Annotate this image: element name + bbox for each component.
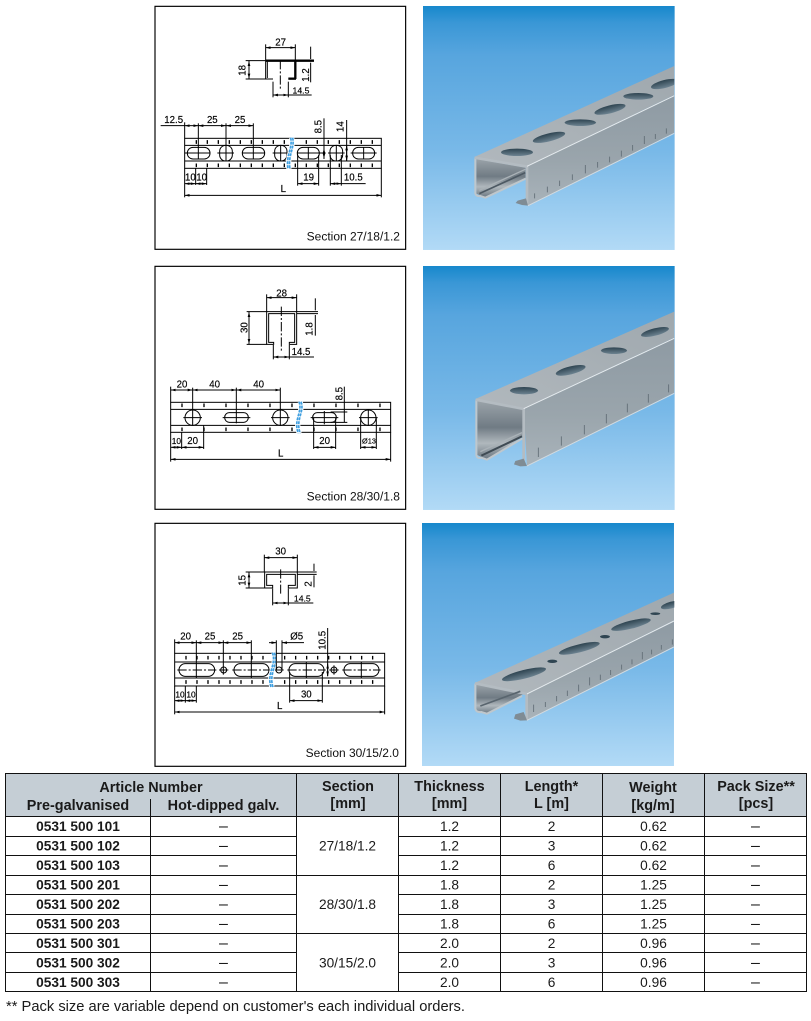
table grid (5, 773, 806, 992)
column: thickness: 2.0 (440, 975, 459, 990)
column: length: 3 (548, 838, 556, 854)
column: length: 6 (548, 916, 556, 932)
column: length: 3 (548, 897, 556, 912)
panel: section 28/30/1.8 photo (423, 266, 675, 510)
column: hot-dipped: – (219, 857, 228, 874)
column: article numbers: 0531 500 303 (36, 975, 120, 990)
table headers: Weight (629, 780, 677, 796)
dimensions: 12.5 (164, 115, 183, 126)
column: pack size: – (751, 876, 760, 894)
panel: section 27/18/1.2 photo (423, 6, 679, 250)
column: section: 30/15/2.0 (319, 956, 376, 970)
panel: section 27/18/1.2 drawing (155, 6, 406, 249)
dimensions: 25 (207, 115, 218, 126)
column: article numbers: 0531 500 302 (36, 956, 120, 970)
column: thickness: 2.0 (440, 936, 459, 951)
table headers: Article Number (99, 780, 203, 796)
dimensions: 10.5 (344, 172, 363, 183)
column: article numbers (36, 819, 120, 990)
cross-section profile: 14.5 (292, 347, 310, 358)
cross-section profile (240, 288, 318, 359)
column: article numbers: 0531 500 202 (36, 897, 120, 912)
column: hot-dipped: – (219, 838, 228, 854)
dimensions: 8.5 (314, 120, 325, 133)
caption: Section 30/15/2.0 (306, 746, 399, 760)
dimensions: 10 (175, 689, 185, 699)
cross-section profile: 14.5 (293, 85, 310, 95)
column: hot-dipped: – (219, 954, 228, 972)
column: thickness: 2.0 (440, 956, 459, 970)
cross-section profile: 1.2 (301, 68, 312, 82)
column: hot-dipped: – (219, 876, 228, 894)
column: pack size: – (751, 838, 760, 854)
column: weight: 1.25 (640, 897, 667, 912)
column: section: 28/30/1.8 (319, 897, 376, 912)
dimensions: 10.5 (317, 631, 328, 650)
dimensions: 19 (303, 172, 314, 183)
column: pack size: – (751, 818, 760, 835)
cross-section profile: 15 (237, 575, 248, 586)
column: hot-dipped: – (219, 896, 228, 913)
column: thickness: 1.2 (440, 819, 459, 834)
column: weight: 0.96 (640, 975, 667, 990)
caption: Section 27/18/1.2 (307, 230, 400, 244)
column: thickness: 1.2 (440, 858, 459, 873)
dimensions: 14 (335, 121, 346, 132)
dimensions: 30 (301, 689, 312, 700)
cross-section profile (237, 547, 317, 605)
column: pack size: – (751, 896, 760, 913)
table headers: Pre-galvanised (27, 798, 129, 814)
table headers: [pcs] (739, 796, 773, 812)
table headers: Pack Size** (717, 779, 795, 795)
perforated rail elevation (185, 123, 381, 169)
column: pack size (751, 818, 760, 991)
dimensions: 20 (177, 379, 187, 390)
rail render (474, 66, 679, 206)
column: hot-dipped (219, 818, 228, 991)
column: thickness: 1.8 (440, 878, 459, 892)
column: article numbers: 0531 500 301 (36, 936, 120, 951)
table headers: L [m] (534, 796, 569, 812)
column: weight: 0.62 (640, 858, 667, 873)
column: section (319, 838, 376, 970)
column: article numbers: 0531 500 102 (36, 838, 120, 854)
dimensions: 40 (209, 379, 220, 390)
column: weight: 0.96 (640, 956, 667, 970)
footnote: ** Pack size are variable depend on customer's each individual orders. (6, 999, 465, 1015)
cross-section profile: 27 (275, 37, 286, 48)
column: pack size: – (751, 857, 760, 874)
column: pack size: – (751, 954, 760, 972)
dimensions: Ø5 (290, 631, 303, 642)
perforated rail elevation (171, 388, 391, 433)
cross-section profile: 28 (276, 288, 287, 299)
column: pack size: – (751, 935, 760, 952)
column: weight: 0.62 (640, 819, 667, 834)
table headers: Hot-dipped galv. (168, 798, 279, 814)
column: length: 2 (548, 936, 555, 951)
column: length (548, 819, 556, 990)
column: article numbers: 0531 500 101 (36, 819, 120, 834)
dimensions: 8.5 (334, 387, 345, 400)
column: thickness (440, 819, 459, 990)
dimensions (171, 379, 391, 462)
cross-section profile: 2 (303, 581, 314, 587)
dimensions: Ø13 (362, 437, 376, 446)
column: thickness: 1.8 (440, 897, 459, 912)
column: thickness: 1.2 (440, 838, 459, 854)
column: hot-dipped: – (219, 974, 228, 991)
table headers: Section (322, 779, 374, 795)
column: weight (640, 819, 667, 990)
dimensions: 25 (205, 632, 215, 643)
table headers (27, 779, 795, 814)
dimensions: L (281, 184, 287, 195)
column: article numbers: 0531 500 201 (36, 878, 120, 892)
column: length: 6 (548, 975, 556, 990)
table headers: [mm] (432, 796, 467, 812)
panel: section 28/30/1.8 drawing (155, 266, 406, 509)
column: thickness: 1.8 (440, 916, 459, 932)
cross-section profile (237, 37, 314, 97)
column: weight: 0.96 (640, 936, 667, 951)
dimensions: 10 (172, 436, 181, 446)
column: length: 3 (548, 956, 556, 970)
column: article numbers: 0531 500 203 (36, 916, 120, 932)
column: length: 2 (548, 819, 555, 834)
cross-section profile: 30 (275, 547, 286, 558)
column: pack size: – (751, 974, 760, 991)
column: hot-dipped: – (219, 818, 228, 835)
caption: Section 28/30/1.8 (307, 490, 400, 504)
dimensions: 10 (185, 172, 196, 183)
column: pack size: – (751, 916, 760, 932)
dimensions: L (277, 701, 283, 712)
dimensions: 20 (187, 436, 198, 447)
column: hot-dipped: – (219, 935, 228, 952)
table headers: [mm] (330, 796, 366, 812)
column: hot-dipped: – (219, 916, 228, 932)
cross-section profile: 14.5 (294, 593, 311, 603)
cross-section profile: 30 (240, 322, 251, 333)
dimensions: 10 (186, 689, 196, 699)
table headers: Length* (525, 779, 579, 795)
dimensions: L (278, 448, 284, 459)
table: article specifications (5, 773, 806, 992)
dimensions: 20 (180, 632, 191, 643)
column: length: 2 (548, 878, 555, 892)
column: article numbers: 0531 500 103 (36, 858, 120, 873)
rail render (475, 593, 682, 721)
panel: section 30/15/2.0 drawing (155, 523, 406, 766)
column: weight: 1.25 (640, 916, 667, 932)
table header background (6, 774, 806, 816)
dimensions (175, 628, 385, 714)
perforated rail elevation (175, 640, 385, 687)
column: weight: 0.62 (640, 838, 667, 854)
dimensions: 20 (319, 436, 330, 447)
rail render (475, 312, 674, 466)
table headers: Thickness (414, 779, 485, 795)
column: section: 27/18/1.2 (319, 838, 376, 854)
cross-section profile: 1.8 (304, 322, 315, 336)
dimensions: 40 (253, 379, 264, 390)
dimensions: 25 (235, 115, 245, 126)
column: weight: 1.25 (640, 878, 667, 892)
column: length: 6 (548, 858, 556, 873)
cross-section profile: 18 (237, 65, 248, 76)
panel: section 30/15/2.0 photo (422, 523, 682, 766)
table headers: [kg/m] (631, 798, 675, 814)
dimensions: 25 (232, 632, 243, 643)
dimensions: 10 (196, 172, 207, 183)
dimensions (161, 115, 381, 197)
